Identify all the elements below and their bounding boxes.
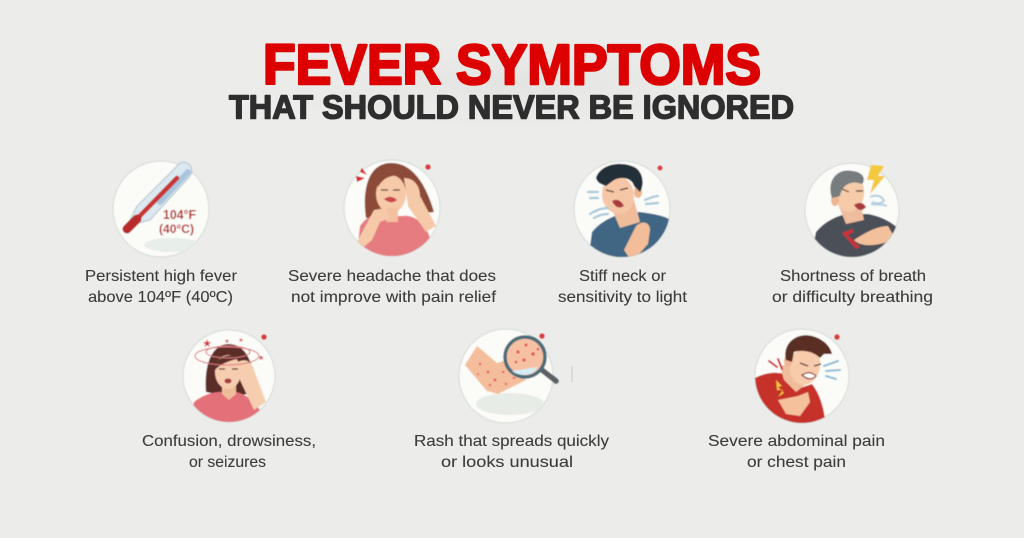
label: shortness of breath: or difficulty breathing xyxy=(772,289,933,306)
icon: dizzy woman xyxy=(183,330,275,426)
title xyxy=(229,33,794,126)
icon: man short of breath xyxy=(805,163,902,262)
icon: thermometer xyxy=(113,161,209,257)
label: severe headache: Severe headache that does xyxy=(288,268,496,285)
label: severe headache xyxy=(288,268,497,306)
heading: fever symptoms: FEVER SYMPTOMS xyxy=(263,33,761,97)
label: high fever xyxy=(85,268,238,306)
subheading: THAT SHOULD NEVER BE IGNORED xyxy=(229,88,794,126)
label: stiff neck xyxy=(558,268,688,306)
label: high fever: above 104ºF (40ºC) xyxy=(88,289,233,306)
icon: woman with headache xyxy=(344,160,440,262)
icon: man holding chest xyxy=(755,329,849,426)
label: confusion: or seizures xyxy=(189,454,266,471)
panel: severe headache xyxy=(288,160,497,306)
label: confusion xyxy=(142,433,316,471)
label: severe headache: not improve with pain relief xyxy=(291,289,497,306)
label: shortness of breath: Shortness of breath xyxy=(780,268,926,285)
label: rash: Rash that spreads quickly xyxy=(414,433,609,450)
icon: man holding neck xyxy=(574,161,676,262)
panel: rash xyxy=(414,329,609,471)
label: abdominal pain: Severe abdominal pain xyxy=(708,433,885,450)
icon: thermometer: 104°F xyxy=(163,207,196,222)
icon: dizzy woman: ★ xyxy=(238,337,244,344)
panel: abdominal pain xyxy=(708,329,885,471)
label: shortness of breath xyxy=(772,268,933,306)
icon: dizzy woman: ★ xyxy=(258,354,264,362)
label: abdominal pain: or chest pain xyxy=(747,454,846,471)
panel: confusion xyxy=(142,330,316,471)
label: rash xyxy=(414,433,609,471)
icon: dizzy woman: ★ xyxy=(202,338,212,350)
label: rash: or looks unusual xyxy=(441,454,573,471)
panel: stiff neck xyxy=(558,161,688,306)
icon: thermometer: (40°C) xyxy=(159,222,194,236)
label: confusion: Confusion, drowsiness, xyxy=(142,433,316,450)
label: high fever: Persistent high fever xyxy=(85,268,238,285)
label: abdominal pain xyxy=(708,433,885,471)
panel: high fever xyxy=(85,161,238,306)
icon: dizzy woman: ★ xyxy=(224,338,230,345)
panel: shortness of breath xyxy=(772,163,933,306)
label: stiff neck: Stiff neck or xyxy=(579,268,667,285)
icon: arm rash with magnifier xyxy=(459,329,556,423)
label: stiff neck: sensitivity to light xyxy=(558,289,688,306)
